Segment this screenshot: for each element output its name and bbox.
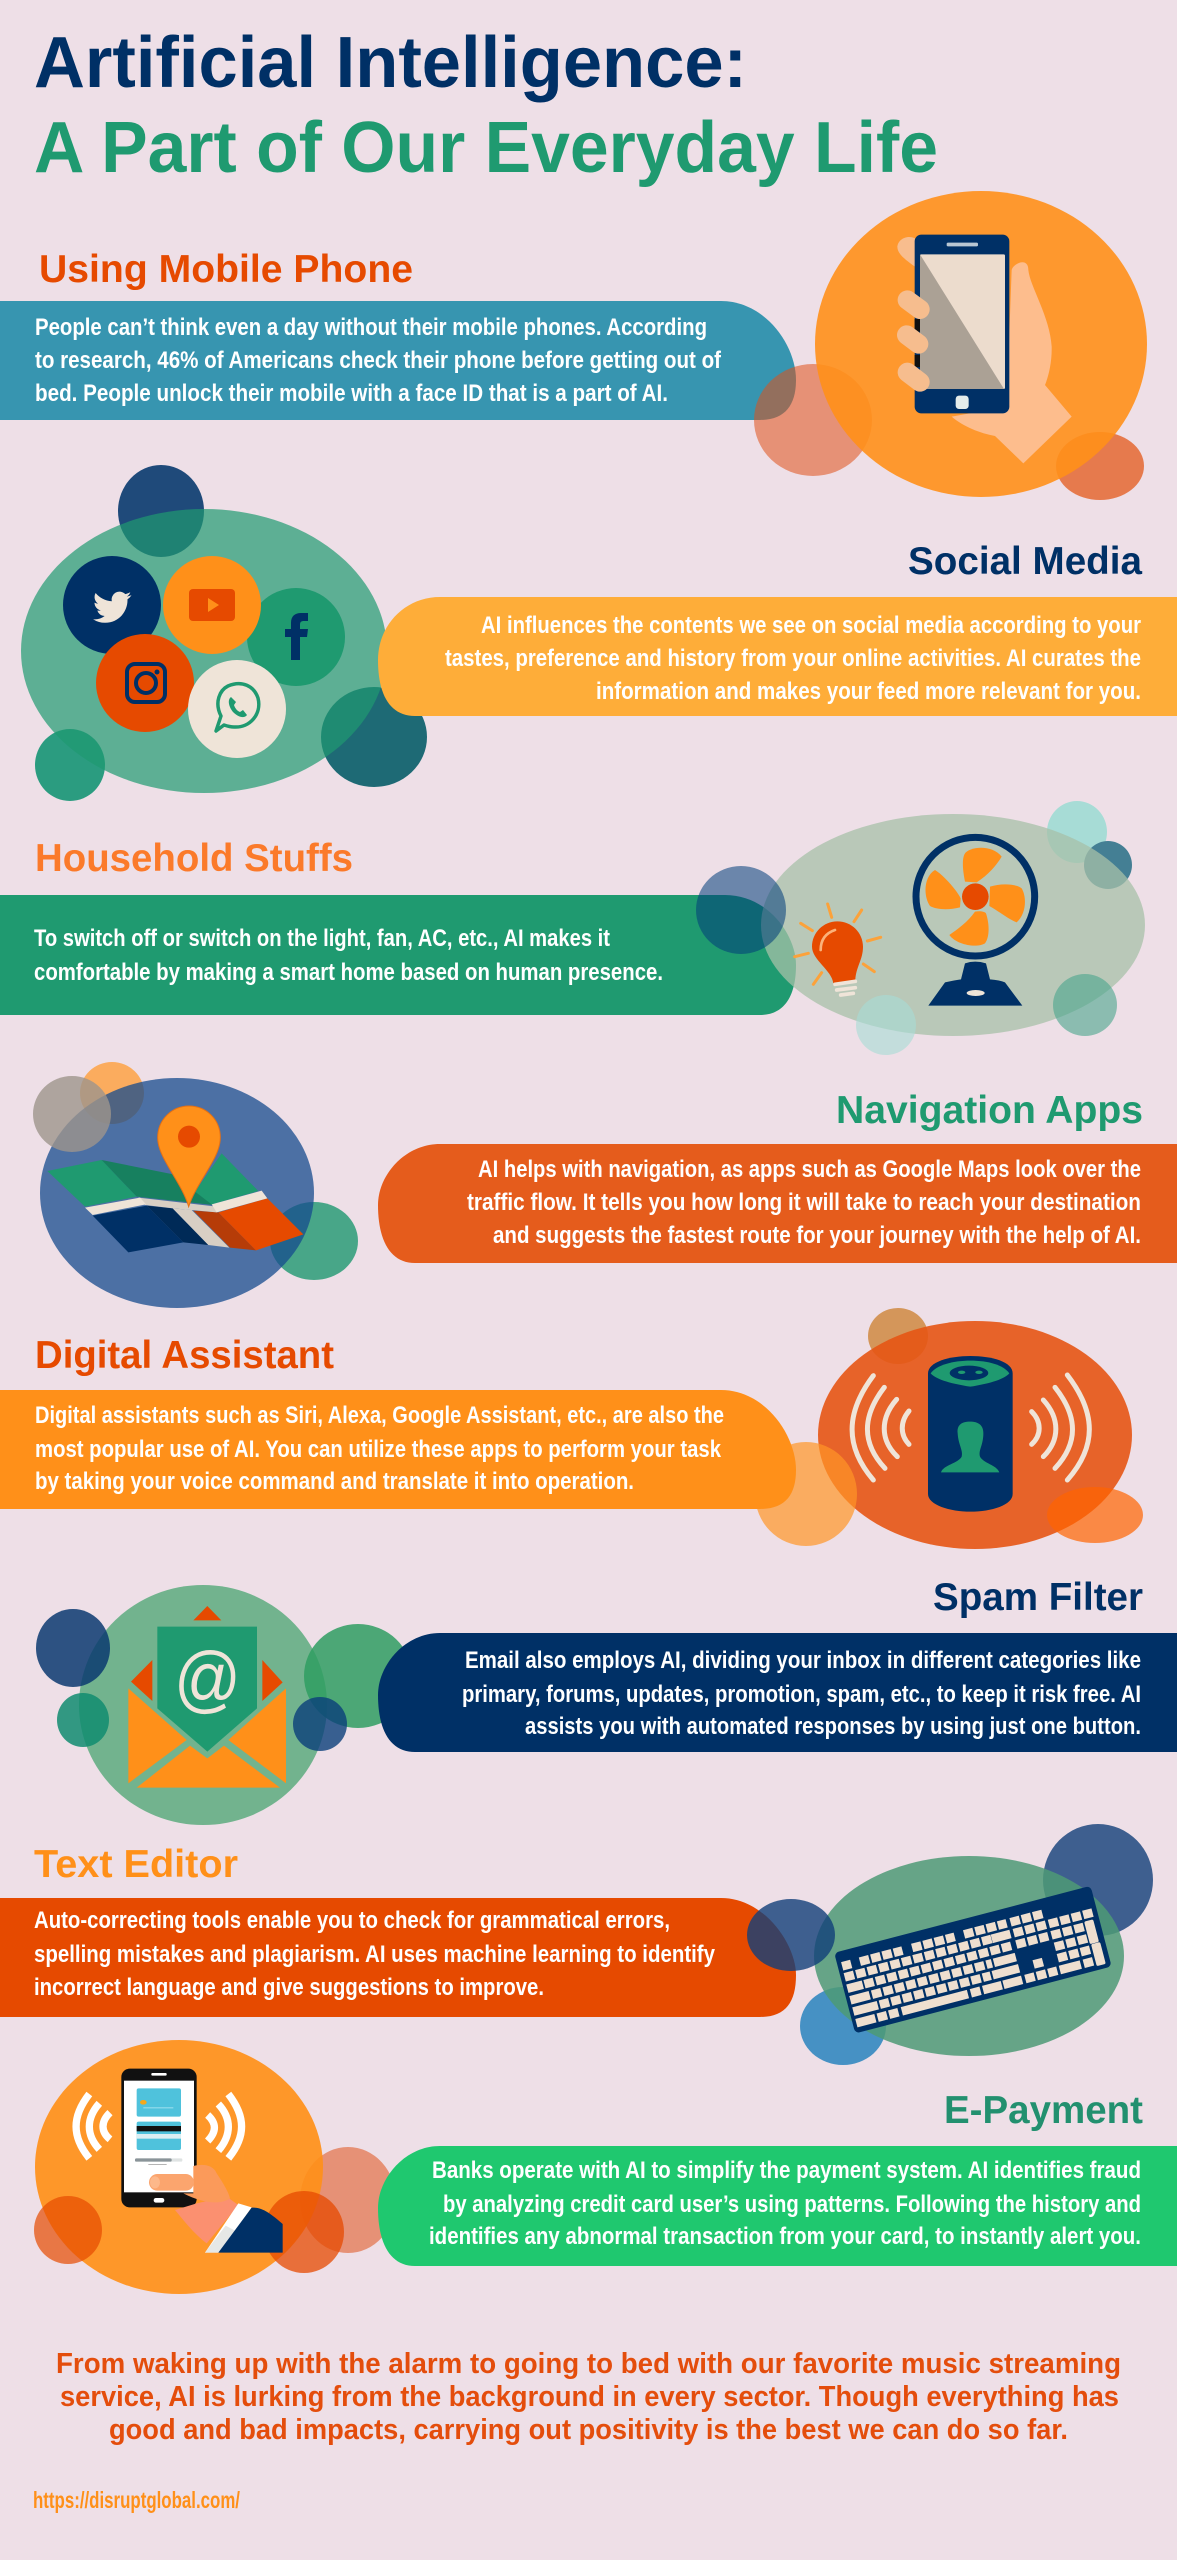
title — [34, 23, 938, 188]
heading: household stuffs: Household Stuffs — [35, 837, 353, 880]
text bar: mobile phone: to research, 46% of Americans check their phone before getting out of — [35, 347, 722, 374]
icon: twitter — [63, 556, 161, 654]
heading: spam filter: Spam Filter — [933, 1576, 1143, 1619]
at symbol: @ — [174, 1637, 241, 1720]
heading: social media: Social Media — [908, 540, 1142, 583]
text bar: digital assistant: by taking your voice command and translate it into operation. — [35, 1468, 634, 1495]
heading: text editor: Text Editor — [34, 1843, 238, 1886]
text bar: mobile phone — [0, 301, 796, 420]
heading: e-payment: E-Payment — [944, 2089, 1143, 2132]
closing statement — [56, 2348, 1121, 2446]
icon: smart speaker — [755, 1308, 1143, 1549]
text bar: mobile phone: bed. People unlock their mobile with a face ID that is a part of AI. — [35, 380, 668, 407]
title: A Part of Our Everyday Life — [34, 108, 938, 188]
panel: spam filter — [36, 1576, 1177, 1825]
panel: digital assistant — [0, 1308, 1143, 1549]
source url: https://disruptglobal.com/ — [33, 2487, 240, 2513]
icon group: social media logos — [21, 465, 427, 801]
text bar: household: To switch off or switch on the light, fan, AC, etc., AI makes it — [34, 925, 610, 952]
text bar: social media — [378, 597, 1177, 716]
panel: household stuffs — [0, 801, 1145, 1055]
heading: navigation apps: Navigation Apps — [836, 1089, 1143, 1132]
text bar: household: comfortable by making a smart home based on human presence. — [34, 959, 663, 986]
icon: map with pin — [33, 1062, 358, 1308]
text bar: e-payment — [378, 2146, 1177, 2266]
heading: digital assistant: Digital Assistant — [35, 1334, 334, 1377]
panel: navigation apps — [33, 1062, 1177, 1308]
heading: using mobile phone: Using Mobile Phone — [39, 248, 413, 291]
panel: text editor — [0, 1824, 1153, 2065]
panel: e-payment — [34, 2040, 1177, 2294]
text bar: navigation — [378, 1144, 1177, 1263]
text bar: text editor: incorrect language and give suggestions to improve. — [34, 1974, 544, 2001]
icon: email envelope — [36, 1585, 412, 1825]
text bar: text editor — [0, 1898, 796, 2017]
panel: using mobile phone — [0, 191, 1147, 500]
closing statement: good and bad impacts, carrying out positivity is the best we can do so far. — [109, 2414, 1068, 2446]
text bar: digital assistant: Digital assistants such as Siri, Alexa, Google Assistant, etc., are also the — [35, 1402, 724, 1429]
icon: hand holding phone — [754, 191, 1147, 500]
icon: instagram — [96, 634, 194, 732]
text bar: household — [0, 895, 796, 1015]
icon: whatsapp — [188, 660, 286, 758]
text bar: digital assistant — [0, 1390, 796, 1509]
text bar: text editor: spelling mistakes and plagiarism. AI uses machine learning to identify — [34, 1941, 715, 1968]
text bar: mobile phone: People can’t think even a day without their mobile phones. According — [35, 314, 707, 341]
closing statement: From waking up with the alarm to going to bed with our favorite music streaming — [56, 2348, 1121, 2380]
icon: facebook — [247, 588, 345, 686]
icon: keyboard — [747, 1824, 1153, 2065]
panel: social media — [21, 465, 1177, 801]
text bar: digital assistant: most popular use of AI. You can utilize these apps to perform your task — [35, 1436, 721, 1463]
text bar: spam filter — [378, 1633, 1177, 1752]
closing statement: service, AI is lurking from the background in every sector. Though everything has — [60, 2381, 1119, 2413]
icon: phone payment — [34, 2040, 396, 2294]
icon: fan and light bulb — [696, 801, 1145, 1055]
icon: youtube — [163, 556, 261, 654]
title: Artificial Intelligence: — [34, 23, 747, 103]
text bar: text editor: Auto-correcting tools enable you to check for grammatical errors, — [34, 1907, 670, 1934]
